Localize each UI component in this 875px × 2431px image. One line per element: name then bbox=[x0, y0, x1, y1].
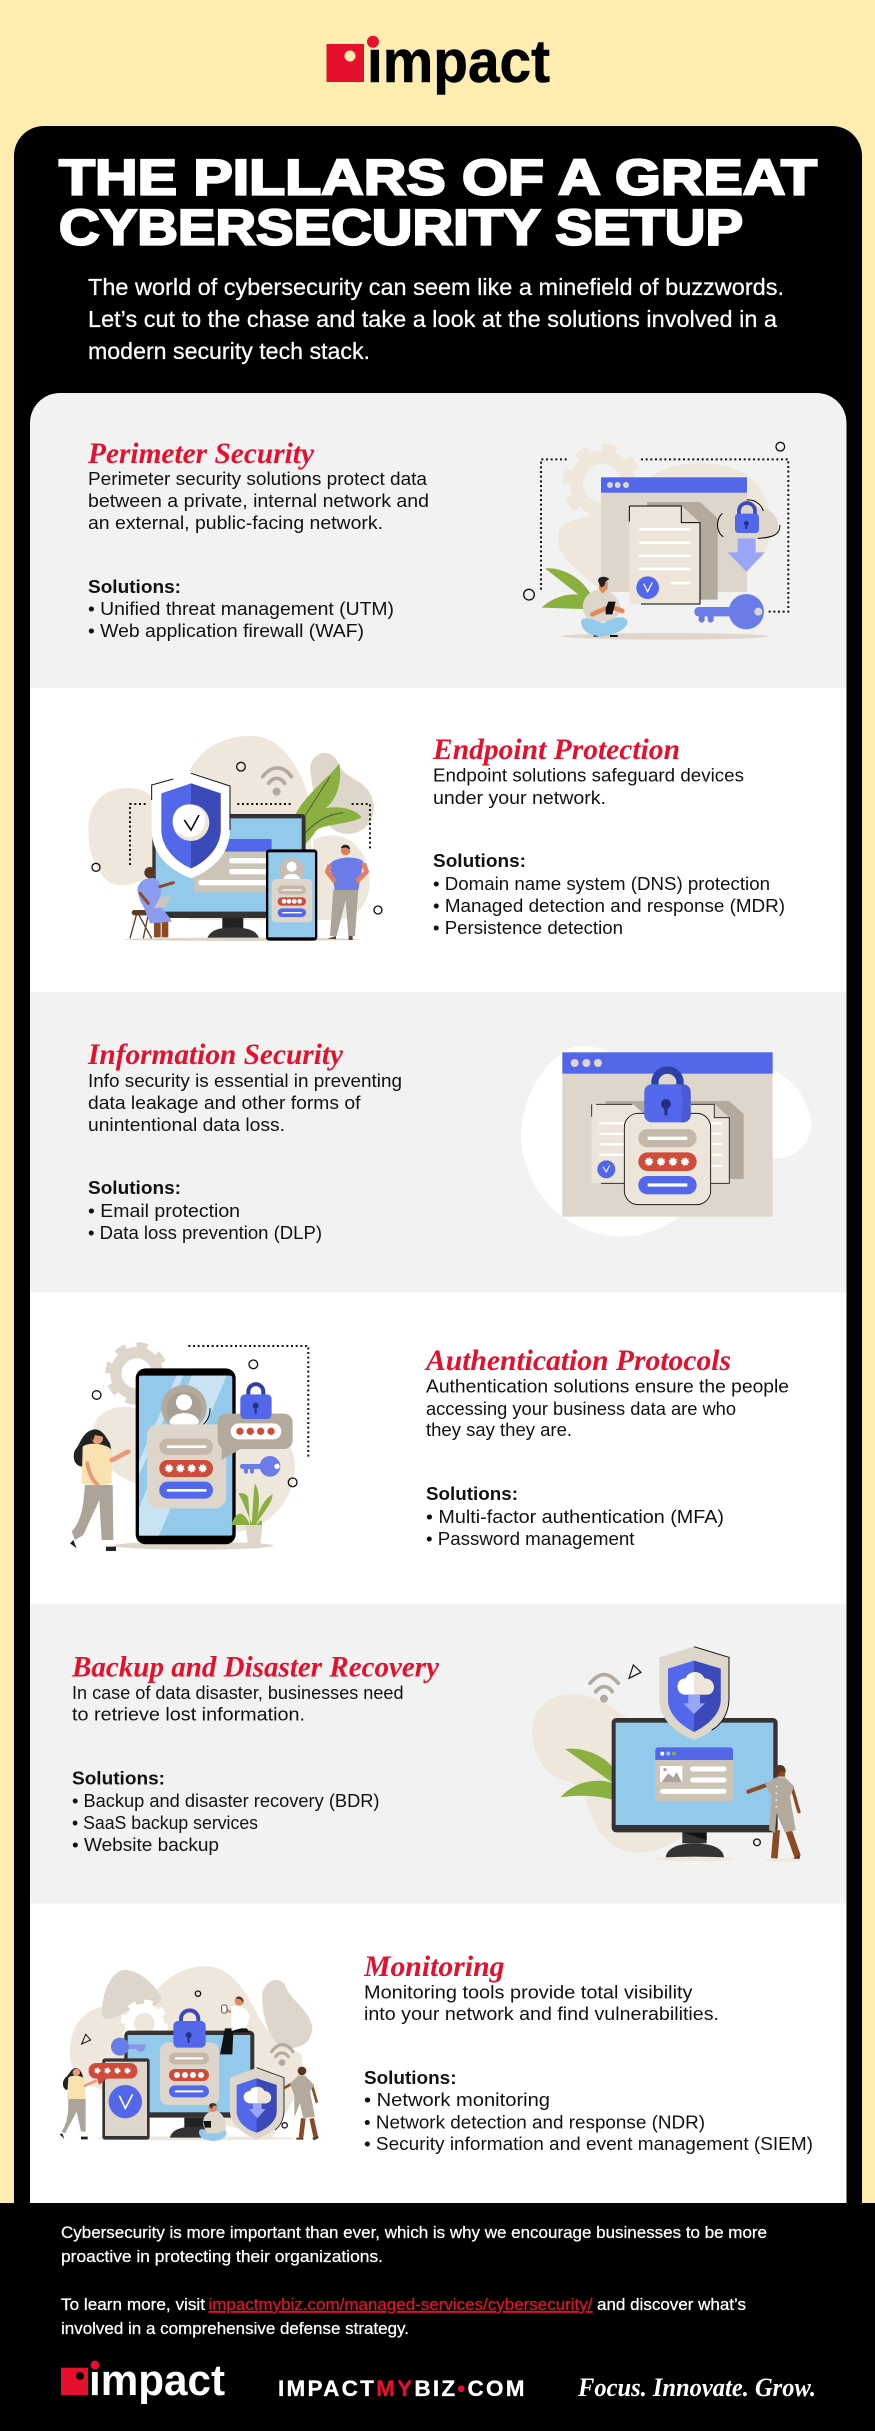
description: Endpoint solutions safeguard devices bbox=[433, 764, 744, 786]
intro text: Let’s cut to the chase and take a look at the solutions involved in a bbox=[88, 306, 777, 332]
solutions list bbox=[426, 1483, 724, 1549]
heading: Monitoring bbox=[363, 1950, 504, 1983]
solutions list: Solutions: bbox=[433, 850, 526, 871]
heading: Authentication Protocols bbox=[424, 1344, 731, 1377]
solutions list: • Network detection and response (NDR) bbox=[364, 2112, 705, 2132]
intro text: The world of cybersecurity can seem like a minefield of buzzwords. bbox=[88, 274, 784, 300]
description bbox=[364, 1982, 719, 2024]
solutions list: Solutions: bbox=[88, 1177, 181, 1198]
solutions list: • Unified threat management (UTM) bbox=[88, 598, 394, 619]
solutions list bbox=[364, 2067, 813, 2154]
closing text: proactive in protecting their organizations. bbox=[61, 2248, 383, 2266]
heading: Information Security bbox=[87, 1038, 344, 1071]
title: CYBERSECURITY SETUP bbox=[59, 200, 743, 256]
description bbox=[433, 764, 744, 808]
solutions list: • Managed detection and response (MDR) bbox=[433, 895, 785, 916]
description: data leakage and other forms of bbox=[88, 1092, 361, 1113]
footer band bbox=[0, 2203, 875, 2431]
illustration: phone login with woman bbox=[70, 1346, 308, 1551]
solutions list: • Network monitoring bbox=[364, 2089, 550, 2110]
solutions list: • Backup and disaster recovery (BDR) bbox=[72, 1790, 380, 1811]
description bbox=[426, 1376, 789, 1440]
heading: Endpoint Protection bbox=[432, 733, 680, 766]
solutions list: Solutions: bbox=[426, 1483, 518, 1504]
solutions list bbox=[88, 1177, 322, 1243]
solutions list: • Web application firewall (WAF) bbox=[88, 620, 364, 641]
solutions list: Solutions: bbox=[364, 2067, 456, 2088]
solutions list: • Website backup bbox=[72, 1834, 219, 1855]
footer logo: impact bbox=[89, 2356, 225, 2405]
solutions list: Solutions: bbox=[88, 576, 181, 597]
heading: Perimeter Security bbox=[87, 437, 315, 470]
solutions list: Solutions: bbox=[72, 1768, 165, 1788]
description: Info security is essential in preventing bbox=[88, 1070, 402, 1091]
description: to retrieve lost information. bbox=[72, 1704, 305, 1724]
description bbox=[72, 1682, 404, 1724]
solutions list: • Data loss prevention (DLP) bbox=[88, 1222, 322, 1243]
closing text: Cybersecurity is more important than ever, which is why we encourage businesses to be more bbox=[61, 2224, 767, 2242]
closing text bbox=[61, 2224, 767, 2338]
closing text: impactmybiz.com/managed-services/cybersecurity/ bbox=[208, 2296, 593, 2314]
illustration: locked login window bbox=[521, 1046, 812, 1237]
solutions list: • Security information and event management (SIEM) bbox=[364, 2133, 813, 2154]
panel: monitoring bbox=[30, 1904, 846, 2203]
solutions list: • SaaS backup services bbox=[72, 1812, 258, 1833]
closing text: To learn more, visit bbox=[61, 2296, 205, 2314]
solutions list: • Domain name system (DNS) protection bbox=[433, 873, 770, 894]
description: they say they are. bbox=[426, 1419, 572, 1440]
panel: authentication protocols bbox=[30, 1292, 846, 1604]
description bbox=[88, 1070, 402, 1135]
top logo: impact bbox=[367, 28, 550, 95]
solutions list: • Multi-factor authentication (MFA) bbox=[426, 1506, 724, 1527]
intro text: modern security tech stack. bbox=[88, 338, 370, 364]
description: Perimeter security solutions protect data bbox=[88, 468, 428, 489]
description: into your network and find vulnerabilities. bbox=[364, 2003, 719, 2024]
description bbox=[88, 468, 429, 533]
description: Authentication solutions ensure the people bbox=[426, 1376, 789, 1396]
description: Monitoring tools provide total visibility bbox=[364, 1982, 693, 2002]
solutions list bbox=[88, 576, 394, 641]
website address: IMPACTMYBIZ•COM bbox=[278, 2376, 524, 2401]
illustration: monitor, shield and phone bbox=[88, 736, 382, 941]
illustration: team around monitor bbox=[60, 1966, 318, 2141]
solutions list bbox=[433, 850, 785, 938]
title: THE PILLARS OF A GREAT bbox=[59, 150, 817, 206]
heading: Backup and Disaster Recovery bbox=[71, 1650, 440, 1684]
description: In case of data disaster, businesses need bbox=[72, 1682, 404, 1703]
description: an external, public-facing network. bbox=[88, 512, 383, 533]
illustration: monitor with cloud shield bbox=[532, 1647, 802, 1862]
description: accessing your business data are who bbox=[426, 1398, 736, 1419]
closing text: and discover what’s bbox=[597, 2296, 746, 2314]
description: under your network. bbox=[433, 787, 606, 808]
panel: information security bbox=[30, 992, 846, 1292]
solutions list: • Password management bbox=[426, 1528, 634, 1549]
solutions list: • Email protection bbox=[88, 1200, 240, 1221]
panel: endpoint protection bbox=[30, 688, 846, 992]
intro text bbox=[88, 274, 784, 364]
panel: backup and disaster recovery bbox=[30, 1604, 846, 1904]
illustration: document with lock and key bbox=[524, 442, 788, 640]
solutions list bbox=[72, 1768, 380, 1855]
description: unintentional data loss. bbox=[88, 1114, 285, 1135]
panel: perimeter security bbox=[30, 393, 846, 688]
solutions list: • Persistence detection bbox=[433, 917, 623, 938]
closing text: involved in a comprehensive defense strategy. bbox=[61, 2320, 409, 2338]
title bbox=[59, 150, 817, 256]
description: between a private, internal network and bbox=[88, 490, 429, 511]
tagline: Focus. Innovate. Grow. bbox=[577, 2373, 816, 2402]
